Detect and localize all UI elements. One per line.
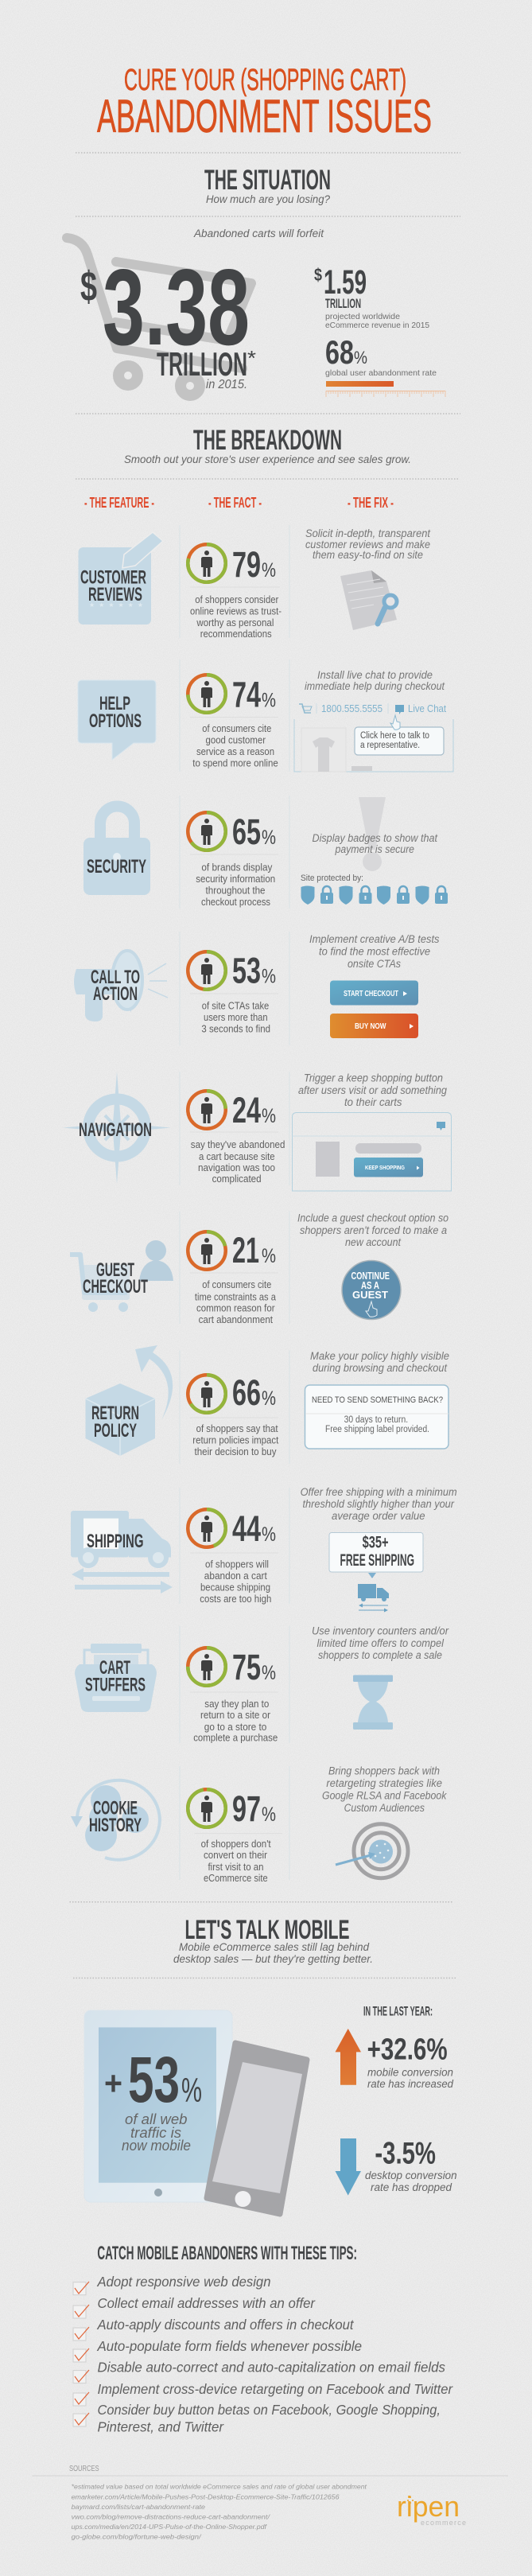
fix text: customer reviews and make xyxy=(305,539,430,551)
icon: tablet xyxy=(84,2010,232,2202)
column headers: - THE FIX - xyxy=(348,495,394,511)
feature: megaphone icon: CALL TO xyxy=(91,967,140,988)
row: guest checkout xyxy=(70,1211,449,1325)
fact text: recommendations xyxy=(200,628,272,640)
tip 7: Pinterest, and Twitter xyxy=(97,2419,224,2435)
feature: customer reviews icon xyxy=(78,532,163,625)
stat: 53 percent mobile traffic: of all web xyxy=(125,2111,188,2127)
mockup: live chat xyxy=(294,702,453,772)
callout: free shipping: FREE SHIPPING xyxy=(340,1551,414,1570)
sources list: emarketer.com/Article/Mobile-Pushes-Post-Desktop-Ecommerce-Site-Traffic/1012656 xyxy=(72,2493,340,2501)
feature: customer reviews icon: ★★★★★★ xyxy=(89,601,143,609)
stat: mobile conversion xyxy=(367,2033,453,2090)
button: start checkout: START CHECKOUT xyxy=(344,989,398,998)
heading: the breakdown: THE BREAKDOWN xyxy=(193,425,342,456)
row: return policy xyxy=(86,1345,449,1464)
fact text xyxy=(190,594,282,640)
column headers xyxy=(84,495,394,511)
button: continue as a guest: CONTINUE xyxy=(351,1270,390,1282)
sources list: *estimated value based on total worldwide eCommerce sales and rate of global user abondment xyxy=(72,2483,367,2491)
fix text: Solicit in-depth, transparent xyxy=(305,527,431,539)
row: call to action xyxy=(74,932,440,1045)
feature: megaphone icon xyxy=(74,949,168,1021)
row: cookie history xyxy=(71,1765,448,1884)
stat: 1.59 trillion: TRILLION xyxy=(325,296,361,311)
stat: 3.38 trillion: * xyxy=(247,346,256,370)
stat: 3.38 trillion: 3.38 xyxy=(103,247,250,368)
fact text: of consumers cite xyxy=(202,723,271,734)
icon: hourglass xyxy=(353,1675,393,1730)
heading: the situation: THE SITUATION xyxy=(204,165,331,196)
fact text: of brands display xyxy=(201,862,273,874)
feature: delivery truck icon: SHIPPING xyxy=(87,1531,143,1552)
fix text: Display badges to show that xyxy=(312,832,438,844)
column headers: - THE FACT - xyxy=(208,495,262,511)
row: navigation xyxy=(63,1072,452,1191)
fix text: to their carts xyxy=(344,1096,402,1108)
icon: exclamation mark xyxy=(359,797,386,871)
stat: 1.59 trillion: eCommerce revenue in 2015 xyxy=(325,321,429,330)
fix text: retargeting strategies like xyxy=(326,1777,442,1789)
fix text xyxy=(301,1486,457,1522)
callout: return policy: NEED TO SEND SOMETHING BACK? xyxy=(312,1395,443,1405)
fact number: 66 percent: % xyxy=(262,1387,276,1410)
fact text: of shoppers will xyxy=(205,1559,269,1570)
fact number: 53 percent: 53 xyxy=(232,951,261,991)
feature: basket icon: STUFFERS xyxy=(85,1674,146,1696)
fact ring: 75 percent xyxy=(188,1648,226,1686)
stat: desktop conversion: rate has dropped xyxy=(371,2181,452,2193)
stat: 68 percent xyxy=(325,333,437,378)
fact number: 21 percent: % xyxy=(262,1245,276,1267)
heading: let's talk mobile: Mobile eCommerce sales still lag behind xyxy=(179,1940,370,1953)
fact number: 97 percent: % xyxy=(262,1804,276,1826)
stat: 53 percent mobile traffic: now mobile xyxy=(122,2138,191,2154)
heading: let's talk mobile: LET'S TALK MOBILE xyxy=(184,1915,350,1945)
fact number: 44 percent: 44 xyxy=(232,1508,261,1549)
stat: 3.38 trillion xyxy=(80,247,256,391)
fix text: shoppers to complete a sale xyxy=(318,1649,442,1661)
fix text: Trigger a keep shopping button xyxy=(304,1072,443,1084)
fact number: 75 percent: % xyxy=(262,1662,276,1684)
fact number: 79 percent: % xyxy=(262,559,276,582)
callout: return policy: Free shipping label provided. xyxy=(325,1425,429,1434)
feature: box and arrow icon: RETURN xyxy=(91,1403,139,1424)
fact text: cart abandonment xyxy=(199,1314,273,1325)
feature: cookies and arrow icon: HISTORY xyxy=(89,1815,142,1836)
tip 5: Disable auto-correct and auto-capitalization on email fields xyxy=(97,2360,445,2376)
fact number: 75 percent: 75 xyxy=(232,1647,261,1687)
fact text: common reason for xyxy=(196,1303,275,1314)
stat: 53 percent mobile traffic: + xyxy=(104,2064,122,2102)
fact number: 24 percent: % xyxy=(262,1105,276,1127)
fact ring: 24 percent xyxy=(188,1091,226,1129)
column headers: - THE FEATURE - xyxy=(84,495,154,511)
fact text: of consumers cite xyxy=(202,1279,271,1290)
fact text: worthy as personal xyxy=(196,617,274,628)
feature: help options speech bubble xyxy=(78,680,156,760)
stat: 53 percent mobile traffic: 53 xyxy=(128,2044,180,2116)
title xyxy=(97,64,432,142)
fact text xyxy=(191,1139,285,1185)
sources list: go-globe.com/blog/fortune-web-design/ xyxy=(72,2533,202,2541)
fix text: Bring shoppers back with xyxy=(328,1765,440,1777)
fact ring: 53 percent xyxy=(188,951,226,990)
logo: ripen ecommerce: ripen xyxy=(397,2490,460,2523)
fix text: Include a guest checkout option so xyxy=(297,1212,449,1224)
fact text: to spend more online xyxy=(192,758,278,769)
fix text: Offer free shipping with a minimum xyxy=(301,1486,457,1498)
stat: 1.59 trillion: projected worldwide xyxy=(325,312,400,321)
sources heading: SOURCES xyxy=(69,2465,99,2473)
fact text: say they plan to xyxy=(204,1699,269,1710)
fact text: return to a site or xyxy=(200,1710,270,1721)
tip 4 xyxy=(73,2338,362,2362)
feature: megaphone icon: ACTION xyxy=(93,983,138,1005)
mockup: live chat: 1800.555.5555 xyxy=(321,702,382,714)
fix text xyxy=(309,933,440,970)
stat: 3.38 trillion: in 2015. xyxy=(206,378,247,391)
stat: mobile conversion: rate has increased xyxy=(367,2078,453,2090)
mockup: live chat: Live Chat xyxy=(408,702,446,714)
fact text: online reviews as trust- xyxy=(190,605,282,617)
heading: the breakdown xyxy=(124,425,411,465)
feature: help options speech bubble: OPTIONS xyxy=(89,710,142,732)
row: cart stuffers xyxy=(75,1625,449,1744)
fact ring: 79 percent xyxy=(188,544,226,582)
fix text: Custom Audiences xyxy=(344,1802,425,1814)
fix text: Implement creative A/B tests xyxy=(309,933,440,945)
fact text: go to a store to xyxy=(204,1722,266,1733)
tip 6 xyxy=(73,2381,453,2406)
feature: padlock icon xyxy=(83,807,150,895)
fact text: convert on their xyxy=(204,1850,267,1861)
callout: free shipping xyxy=(329,1532,423,1578)
stat: 68 percent: % xyxy=(354,348,367,368)
tip 2 xyxy=(73,2295,316,2318)
row: customer reviews xyxy=(78,525,431,640)
fix text xyxy=(305,527,431,561)
fact number: 24 percent: 24 xyxy=(232,1090,261,1130)
fact text: 3 seconds to find xyxy=(201,1024,270,1035)
fact ring: 97 percent xyxy=(188,1789,226,1827)
fact text: eCommerce site xyxy=(204,1873,268,1884)
fix text: to find the most effective xyxy=(319,945,430,958)
fact number: 74 percent: 74 xyxy=(232,675,261,714)
stat: 3.38 trillion: $ xyxy=(80,263,97,310)
fact text: because shipping xyxy=(200,1582,270,1593)
fact text: of shoppers say that xyxy=(196,1423,278,1434)
fix text: threshold slightly higher than your xyxy=(302,1498,454,1510)
fix text: Install live chat to provide xyxy=(317,669,433,681)
fact text: say they've abandoned xyxy=(191,1139,285,1150)
stat: 53 percent mobile traffic: % xyxy=(181,2072,202,2110)
fact text: first visit to an xyxy=(208,1862,264,1873)
mockup: live chat: a representative. xyxy=(360,741,420,750)
tips checklist xyxy=(73,2274,453,2435)
bar: abandonment rate xyxy=(326,381,445,397)
fix text: Make your policy highly visible xyxy=(310,1350,449,1362)
stat: 68 percent: 68 xyxy=(325,333,354,371)
fix text: immediate help during checkout xyxy=(305,680,445,692)
feature: delivery truck icon xyxy=(71,1511,173,1593)
security badges xyxy=(301,886,448,905)
fix text: during browsing and checkout xyxy=(313,1362,448,1374)
heading: let's talk mobile xyxy=(173,1915,373,1965)
feature: box and arrow icon: POLICY xyxy=(94,1420,137,1442)
fact text: of shoppers don't xyxy=(201,1839,271,1850)
feature: cart and person icon: GUEST xyxy=(96,1259,134,1281)
arrow: up xyxy=(336,2029,361,2085)
feature: padlock icon: SECURITY xyxy=(87,856,146,877)
fact text: costs are too high xyxy=(200,1593,271,1605)
fact text: their decision to buy xyxy=(194,1446,277,1457)
tip 1 xyxy=(73,2274,270,2295)
feature: basket icon: CART xyxy=(99,1657,130,1679)
fix text: after users visit or add something xyxy=(298,1084,447,1096)
fact text: users more than xyxy=(204,1012,268,1023)
mockup: keep shopping: KEEP SHOPPING xyxy=(365,1164,405,1171)
fact text: of shoppers consider xyxy=(195,594,278,605)
fix text: onsite CTAs xyxy=(348,958,401,970)
fix text xyxy=(310,1350,449,1374)
callout: return policy xyxy=(305,1385,449,1449)
tip 3 xyxy=(73,2317,355,2341)
button: buy now: BUY NOW xyxy=(355,1021,386,1031)
feature: compass icon: NAVIGATION xyxy=(79,1119,152,1141)
stat: 53 percent mobile traffic xyxy=(104,2044,202,2154)
fact text: of site CTAs take xyxy=(202,1001,269,1012)
sources list: ups.com/media/en/2014-UPS-Pulse-of-the-Online-Shopper.pdf xyxy=(72,2523,268,2531)
button: buy now xyxy=(330,1014,418,1038)
tip 3: Auto-apply discounts and offers in checkout xyxy=(97,2317,355,2333)
text: abandoned carts: Abandoned carts will forfeit xyxy=(193,228,324,239)
fact number: 65 percent: % xyxy=(262,827,276,849)
arrow: down xyxy=(336,2138,361,2196)
fix text xyxy=(312,832,438,855)
feature: box and arrow icon xyxy=(86,1345,173,1456)
feature: cookies and arrow icon: COOKIE xyxy=(93,1798,138,1819)
stat: 1.59 trillion xyxy=(314,263,429,330)
fact text: checkout process xyxy=(201,897,270,908)
fact number: 97 percent: 97 xyxy=(232,1788,261,1829)
fact text: security information xyxy=(196,874,275,885)
stat: in the last year heading: IN THE LAST YEAR: xyxy=(363,2004,433,2019)
fact text: complete a purchase xyxy=(193,1733,278,1744)
logo: ripen ecommerce: ecommerce xyxy=(421,2519,466,2527)
stat: mobile conversion: +32.6% xyxy=(367,2033,448,2067)
fix text: them easy-to-find on site xyxy=(313,549,423,561)
feature: help options speech bubble: HELP xyxy=(99,693,130,714)
fact number: 79 percent: 79 xyxy=(232,544,261,585)
mockup: keep shopping xyxy=(293,1112,452,1191)
fact text xyxy=(201,1839,271,1884)
fix text xyxy=(322,1765,448,1814)
icon: smartphone xyxy=(207,2043,307,2214)
fact number: 21 percent: 21 xyxy=(232,1230,259,1270)
feature: cart and person icon xyxy=(70,1240,173,1312)
tip 2: Collect email addresses with an offer xyxy=(97,2295,316,2311)
fix text xyxy=(298,1072,447,1108)
fact text xyxy=(193,1699,278,1744)
fact text xyxy=(200,1559,271,1605)
button: continue as a guest xyxy=(342,1260,401,1319)
stat: 3.38 trillion: TRILLION xyxy=(157,345,247,383)
button: continue as a guest: GUEST xyxy=(352,1289,388,1301)
sources list xyxy=(72,2483,367,2541)
tip 5 xyxy=(73,2360,445,2383)
feature: cookies and arrow icon xyxy=(71,1780,160,1860)
fix text: shoppers aren't forced to make a xyxy=(300,1224,447,1236)
fix text: new account xyxy=(345,1236,402,1248)
icon: shopping cart xyxy=(67,238,251,395)
fact text xyxy=(192,723,278,769)
stat: mobile conversion: mobile conversion xyxy=(367,2066,453,2078)
heading: the breakdown: Smooth out your store's user experience and see sales grow. xyxy=(124,453,411,465)
fact text: service as a reason xyxy=(196,746,274,757)
fact ring: 66 percent xyxy=(188,1375,226,1413)
stat: 1.59 trillion: $ xyxy=(314,265,322,285)
feature: customer reviews icon: REVIEWS xyxy=(88,584,142,605)
callout: return policy: 30 days to return. xyxy=(344,1415,408,1425)
tip 4: Auto-populate form fields whenever possible xyxy=(97,2338,362,2354)
stat: 68 percent: global user abandonment rate xyxy=(325,368,437,378)
stat: desktop conversion xyxy=(365,2137,457,2193)
button: start checkout xyxy=(330,980,418,1006)
fact number: 53 percent: % xyxy=(262,966,276,988)
fact number: 66 percent: 66 xyxy=(232,1372,261,1413)
heading: the situation xyxy=(204,165,331,205)
fact text: complicated xyxy=(212,1173,262,1185)
fact text xyxy=(201,1001,270,1035)
text: site protected by: Site protected by: xyxy=(301,874,363,883)
fact text: abandon a cart xyxy=(204,1570,267,1582)
fact text xyxy=(192,1423,279,1457)
fact ring: 65 percent xyxy=(188,812,226,850)
sources list: baymard.com/lists/cart-abandonment-rate xyxy=(72,2503,205,2511)
stat: desktop conversion: desktop conversion xyxy=(365,2169,457,2181)
fact text: return policies impact xyxy=(192,1435,279,1446)
mockup: live chat: Click here to talk to xyxy=(360,731,429,741)
fact text: throughout the xyxy=(205,885,266,896)
fact ring: 74 percent xyxy=(188,675,226,713)
heading: the situation: How much are you losing? xyxy=(206,193,330,205)
fact text: navigation was too xyxy=(198,1162,275,1173)
fix text xyxy=(297,1212,449,1248)
tip 1: Adopt responsive web design xyxy=(97,2274,270,2290)
fact text xyxy=(195,1279,276,1325)
tip 6: Implement cross-device retargeting on Facebook and Twitter xyxy=(97,2381,453,2397)
heading: let's talk mobile: desktop sales — but they're getting better. xyxy=(173,1952,373,1965)
tip 7 xyxy=(73,2402,441,2435)
stat: desktop conversion: -3.5% xyxy=(375,2137,436,2171)
fact text: a cart because site xyxy=(199,1151,275,1162)
fact ring: 21 percent xyxy=(188,1232,226,1270)
tip 7: Consider buy button betas on Facebook, Google Shopping, xyxy=(97,2402,441,2418)
icon: small truck xyxy=(358,1584,389,1612)
feature: cart and person icon: CHECKOUT xyxy=(83,1276,148,1298)
fix text xyxy=(312,1625,449,1661)
row: security xyxy=(83,796,448,909)
feature: customer reviews icon: CUSTOMER xyxy=(80,566,146,589)
icon: document and magnifier xyxy=(340,570,397,630)
fact text: good customer xyxy=(205,735,266,746)
callout: free shipping: $35+ xyxy=(363,1534,389,1551)
fact number: 74 percent: % xyxy=(262,689,276,711)
sources list: vwo.com/blog/remove-distractions-reduce-cart-abandonment/ xyxy=(72,2513,271,2521)
fix text: Google RLSA and Facebook xyxy=(322,1790,448,1802)
button: continue as a guest: AS A xyxy=(361,1279,379,1291)
fact text xyxy=(196,862,275,908)
icon: target with cookie xyxy=(336,1824,408,1878)
feature: basket icon xyxy=(75,1644,157,1712)
fact text: time constraints as a xyxy=(195,1292,276,1303)
stat: 53 percent mobile traffic: traffic is xyxy=(130,2125,181,2141)
stat: 1.59 trillion: 1.59 xyxy=(324,263,367,302)
fix text xyxy=(305,669,445,692)
fact ring: 44 percent xyxy=(188,1509,226,1547)
fact number: 65 percent: 65 xyxy=(232,811,261,852)
feature: compass icon xyxy=(63,1072,171,1184)
row: help options xyxy=(78,660,453,772)
fix text: Use inventory counters and/or xyxy=(312,1625,449,1637)
row: shipping xyxy=(71,1486,457,1612)
fix text: limited time offers to compel xyxy=(316,1637,445,1649)
fact number: 44 percent: % xyxy=(262,1523,276,1546)
fix text: average order value xyxy=(332,1510,425,1522)
fix text: payment is secure xyxy=(335,843,414,855)
